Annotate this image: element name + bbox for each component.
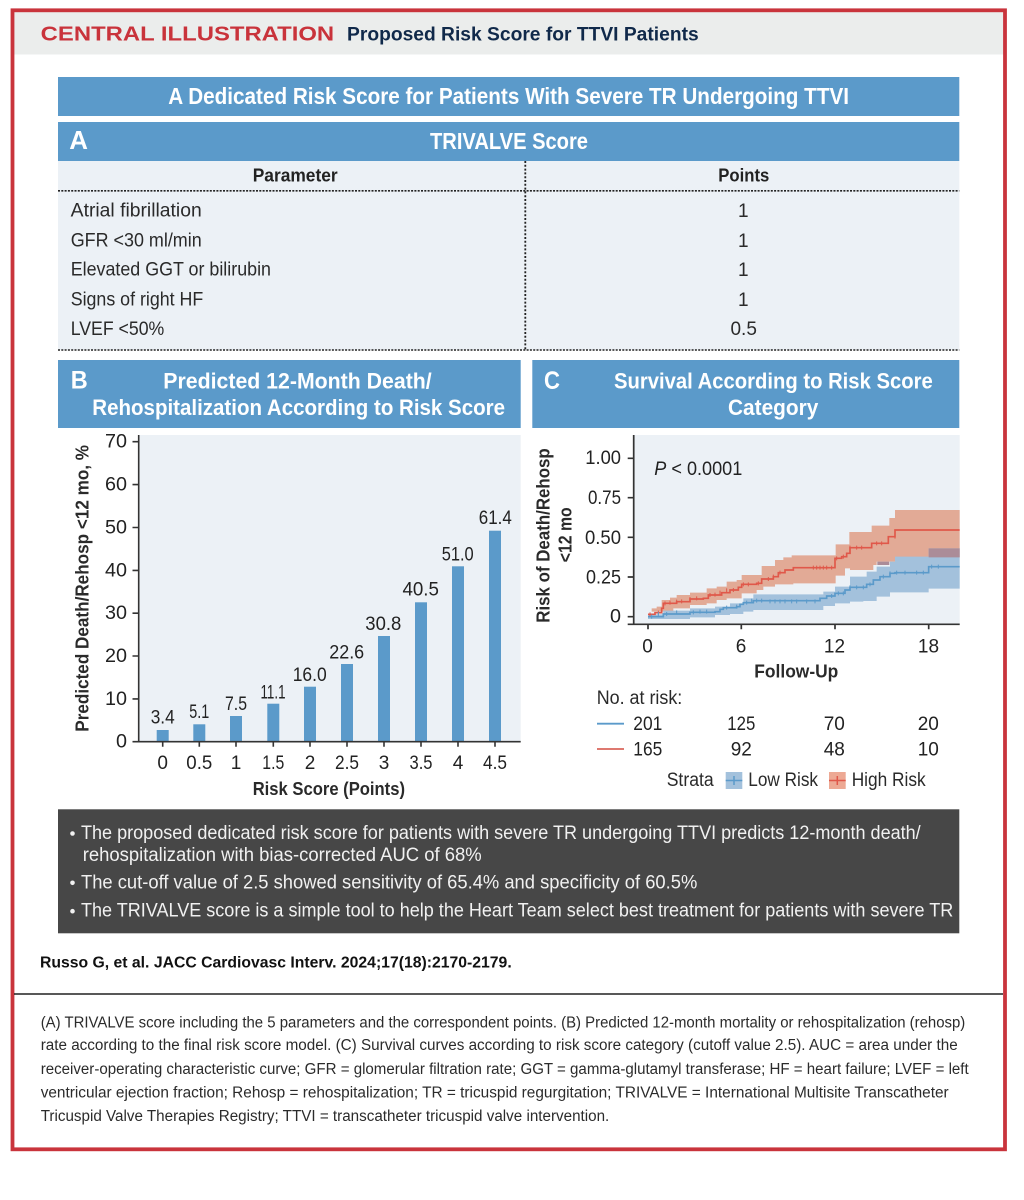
y axis title: Predicted Death/Rehosp <12 mo, % bbox=[72, 445, 92, 732]
value labels: 61.4 bbox=[479, 508, 512, 529]
x axis labels: 0 bbox=[642, 636, 653, 657]
panel A header: A bbox=[69, 125, 88, 155]
column headers: Points bbox=[718, 166, 769, 186]
header band bbox=[13, 12, 1004, 54]
y axis labels: 70 bbox=[105, 432, 127, 453]
value labels: 5.1 bbox=[189, 702, 209, 723]
y axis labels bbox=[585, 448, 621, 627]
value labels bbox=[151, 508, 512, 728]
x axis labels: 18 bbox=[918, 636, 939, 657]
parameter rows: GFR <30 ml/min bbox=[71, 231, 202, 252]
points values: 1 bbox=[738, 231, 749, 252]
heading banner: A Dedicated Risk Score for Patients With Severe TR Undergoing TTVI bbox=[168, 83, 849, 109]
figure caption: (A) TRIVALVE score including the 5 parameters and the correspondent points. (B) Predicted 12-month mortality or rehospitalization (rehosp) bbox=[41, 1014, 965, 1031]
value labels: 51.0 bbox=[442, 545, 474, 566]
y axis labels: 0.50 bbox=[585, 528, 621, 549]
points values bbox=[730, 201, 757, 340]
x axis labels: 4 bbox=[453, 753, 464, 774]
y axis title bbox=[533, 448, 576, 623]
points values: 1 bbox=[738, 201, 749, 222]
low risk label: Low Risk bbox=[748, 770, 818, 791]
x axis title: Risk Score (Points) bbox=[253, 779, 405, 799]
y axis labels: 0 bbox=[610, 606, 621, 627]
panel C header bbox=[532, 360, 959, 428]
x axis labels: 12 bbox=[824, 636, 845, 657]
low risk row: 201 bbox=[633, 714, 662, 735]
value labels: 3.4 bbox=[151, 707, 175, 728]
low risk row bbox=[597, 714, 939, 735]
value labels: 40.5 bbox=[402, 580, 439, 601]
panel C header: C bbox=[544, 367, 560, 395]
panel A header: TRIVALVE Score bbox=[430, 128, 588, 154]
points values: 1 bbox=[738, 260, 749, 281]
y axis labels: 30 bbox=[105, 603, 127, 624]
y axis title: <12 mo bbox=[556, 507, 576, 562]
key takeaways box bbox=[58, 809, 959, 933]
survival chart plot bbox=[533, 435, 960, 681]
column headers: Parameter bbox=[253, 166, 338, 186]
panel B header: B bbox=[71, 366, 88, 394]
parameter rows: LVEF <50% bbox=[71, 319, 164, 340]
panel A: TRIVALVE score table bbox=[58, 122, 959, 350]
x axis labels: 0.5 bbox=[186, 753, 212, 774]
value labels: 7.5 bbox=[225, 694, 247, 715]
figure caption: Tricuspid Valve Therapies Registry; TTVI = transcatheter tricuspid valve intervention. bbox=[41, 1108, 609, 1125]
low risk row: 125 bbox=[727, 714, 755, 735]
low risk row: 20 bbox=[918, 714, 939, 735]
high risk row: 92 bbox=[731, 740, 752, 761]
key takeaways box: The cut-off value of 2.5 showed sensitivity of 65.4% and specificity of 60.5% bbox=[81, 872, 697, 893]
x axis labels: 1.5 bbox=[262, 753, 284, 774]
axes bbox=[132, 435, 521, 747]
high risk row: 48 bbox=[824, 740, 845, 761]
icon: high risk swatch bbox=[829, 772, 846, 789]
high risk label: High Risk bbox=[852, 770, 926, 791]
high risk confidence band bbox=[648, 510, 960, 612]
heading banner bbox=[58, 77, 959, 116]
table body bbox=[58, 161, 959, 350]
legend: strata: Strata bbox=[667, 770, 714, 791]
y axis labels: 1.00 bbox=[585, 448, 621, 469]
value labels: 30.8 bbox=[365, 614, 401, 635]
y axis labels: 60 bbox=[105, 475, 127, 496]
y axis labels: 0 bbox=[116, 732, 127, 753]
parameter rows: Atrial fibrillation bbox=[71, 201, 202, 222]
panel C header: Survival According to Risk Score bbox=[614, 368, 933, 393]
panel C: survival curves bbox=[532, 360, 960, 791]
x axis labels: 0 bbox=[157, 753, 168, 774]
panel C header: Category bbox=[728, 395, 819, 420]
x axis labels: 2.5 bbox=[335, 753, 359, 774]
y axis labels: 50 bbox=[105, 518, 127, 538]
axes bbox=[628, 435, 960, 629]
band overlap bbox=[877, 548, 960, 565]
parameter rows: Elevated GGT or bilirubin bbox=[71, 260, 271, 281]
high risk row: 10 bbox=[918, 740, 939, 761]
citation: Russo G, et al. JACC Cardiovasc Interv. 2024;17(18):2170-2179. bbox=[40, 954, 512, 971]
title: central illustration: CENTRAL ILLUSTRATION bbox=[41, 24, 334, 46]
parameter rows: Signs of right HF bbox=[71, 290, 203, 311]
x axis labels: 1 bbox=[231, 753, 241, 774]
points values: 1 bbox=[738, 290, 749, 311]
key takeaways box: The proposed dedicated risk score for patients with severe TR undergoing TTVI predicts 12-month death/ bbox=[81, 823, 921, 844]
y axis labels: 0.25 bbox=[586, 567, 621, 588]
x axis labels: 3.5 bbox=[410, 753, 432, 774]
parameter rows bbox=[71, 201, 271, 340]
figure caption: receiver-operating characteristic curve; GFR = glomerular filtration rate; GGT = gamma-glutamyl transferase; HF = heart failure; LVEF = left bbox=[41, 1061, 969, 1078]
subtitle: Proposed Risk Score for TTVI Patients bbox=[347, 25, 699, 46]
key takeaways box: rehospitalization with bias-corrected AUC of 68% bbox=[83, 845, 482, 866]
number at risk table bbox=[597, 688, 939, 761]
legend: strata bbox=[667, 770, 926, 791]
censor marks bbox=[650, 535, 895, 616]
figure caption: ventricular ejection fraction; Rehosp = rehospitalization; TR = tricuspid regurgitation; TRIVALVE = International Multisite Transcatheter bbox=[41, 1084, 949, 1101]
x axis labels: 4.5 bbox=[483, 753, 507, 774]
panel B header: Predicted 12-Month Death/ bbox=[163, 368, 432, 393]
value labels: 22.6 bbox=[329, 642, 364, 663]
x axis labels bbox=[642, 636, 939, 657]
key takeaways box: The TRIVALVE score is a simple tool to help the Heart Team select best treatment for patients with severe TR bbox=[81, 901, 953, 922]
figure caption: rate according to the final risk score model. (C) Survival curves according to risk score category (cutoff value 2.5). AUC = area under the bbox=[41, 1037, 958, 1054]
y axis title: Risk of Death/Rehosp bbox=[533, 448, 553, 623]
y axis labels: 20 bbox=[105, 646, 127, 667]
bars bbox=[157, 531, 501, 742]
panel B: predicted death or rehospitalization bar chart bbox=[58, 360, 521, 799]
x axis labels bbox=[157, 753, 507, 774]
value labels: 16.0 bbox=[293, 665, 327, 686]
y axis labels bbox=[105, 432, 127, 753]
x axis labels: 2 bbox=[305, 753, 315, 774]
bar chart plot bbox=[72, 432, 521, 799]
panel B header: Rehospitalization According to Risk Score bbox=[92, 395, 505, 420]
y axis labels: 0.75 bbox=[588, 488, 621, 509]
x axis labels: 3 bbox=[379, 753, 389, 774]
high risk row: 165 bbox=[633, 740, 662, 761]
y axis labels: 40 bbox=[105, 560, 127, 581]
y axis labels: 10 bbox=[105, 689, 127, 710]
low risk confidence band bbox=[648, 548, 960, 619]
high risk row bbox=[597, 740, 939, 761]
x axis title: Follow-Up bbox=[754, 661, 838, 681]
curves with confidence bands bbox=[648, 510, 960, 619]
low risk curve bbox=[648, 567, 960, 617]
number at risk table: No. at risk: bbox=[597, 688, 682, 709]
points values: 0.5 bbox=[730, 319, 757, 340]
low risk row: 70 bbox=[824, 714, 845, 735]
column headers bbox=[253, 166, 769, 186]
p value: P < 0.0001 bbox=[654, 459, 742, 480]
x axis labels: 6 bbox=[736, 636, 746, 657]
value labels: 11.1 bbox=[260, 682, 286, 703]
panel B header bbox=[58, 360, 521, 428]
panel A header bbox=[58, 122, 959, 161]
icon: low risk swatch bbox=[726, 772, 742, 789]
figure caption bbox=[41, 1014, 969, 1125]
high risk curve bbox=[648, 530, 960, 614]
